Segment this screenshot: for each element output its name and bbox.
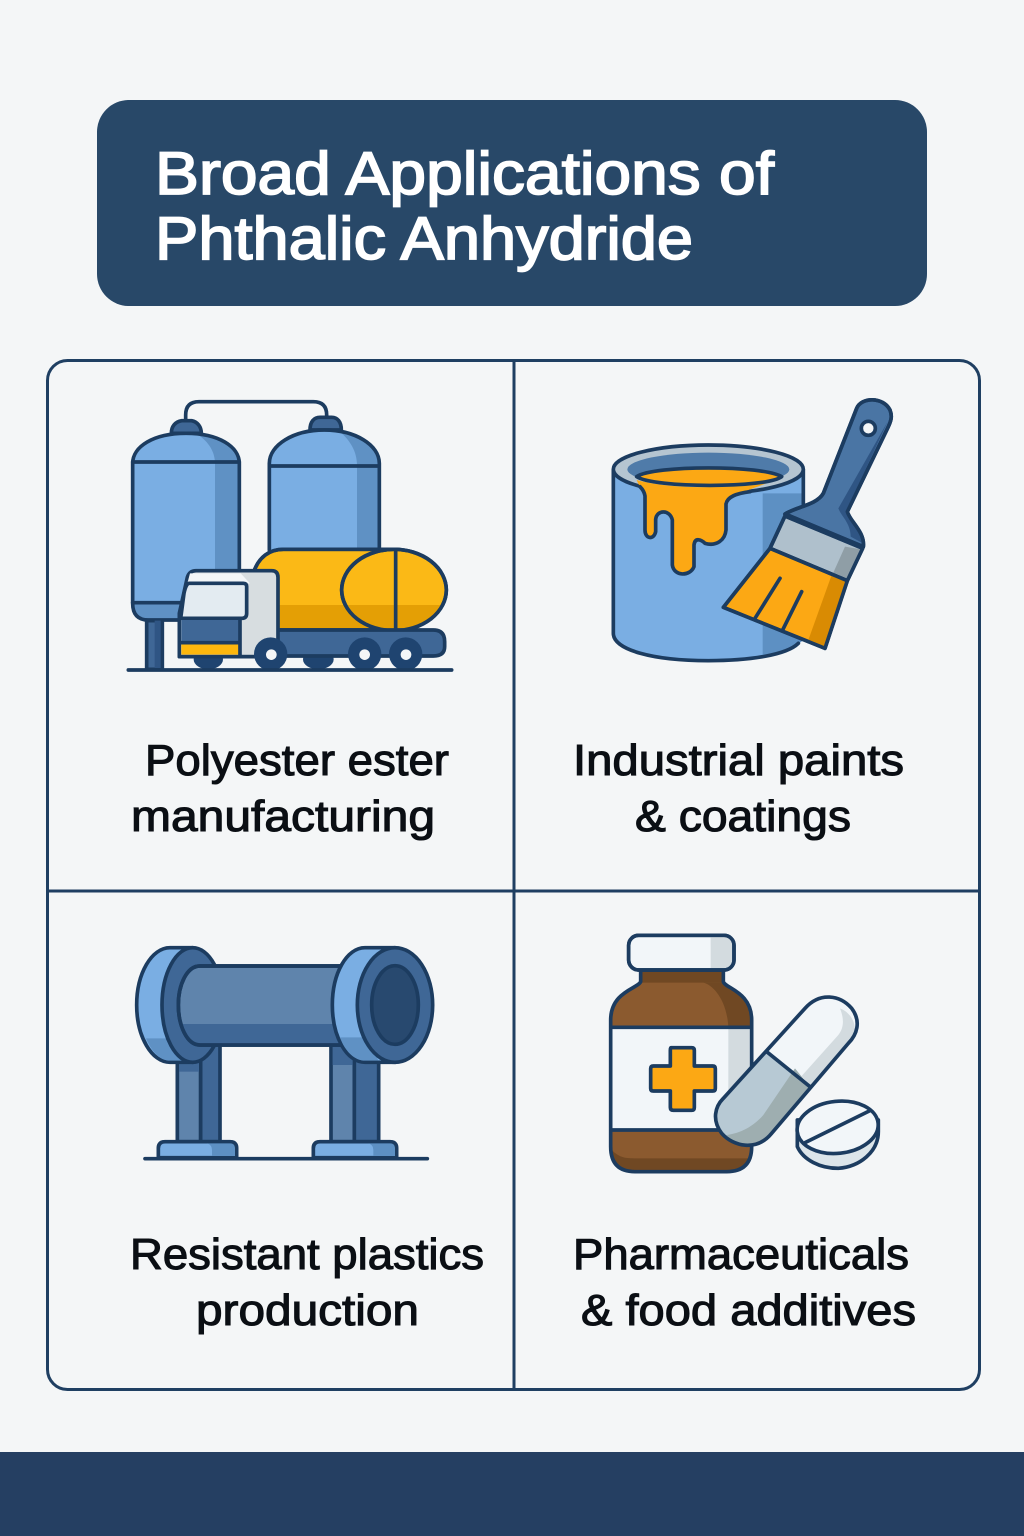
label: pharmaceuticals and food additives: Pharmaceuticals xyxy=(573,1230,909,1279)
label: resistant plastics production: Resistant plastics xyxy=(130,1230,484,1279)
label: resistant plastics production: production xyxy=(196,1286,419,1335)
icon: paint can and brush xyxy=(613,400,891,661)
icon: storage tanks and tanker truck xyxy=(128,402,452,671)
applications grid panel xyxy=(47,360,980,1390)
label: resistant plastics production xyxy=(130,1230,484,1335)
label: industrial paints and coatings xyxy=(573,736,904,841)
label: pharmaceuticals and food additives: & food additives xyxy=(581,1286,916,1335)
label: polyester ester manufacturing: manufacturing xyxy=(131,792,435,841)
label: industrial paints and coatings: & coatings xyxy=(635,792,851,841)
title banner: Phthalic Anhydride xyxy=(155,205,693,272)
icon: pipe on supports xyxy=(137,948,433,1159)
footer bar xyxy=(0,1452,1024,1536)
label: pharmaceuticals and food additives xyxy=(573,1230,916,1335)
label: polyester ester manufacturing: Polyester ester xyxy=(145,736,449,785)
title banner xyxy=(97,100,927,306)
label: industrial paints and coatings: Industrial paints xyxy=(573,736,904,785)
icon: medicine bottle, capsule and tablet xyxy=(611,935,881,1172)
label: polyester ester manufacturing xyxy=(131,736,449,841)
title banner: Broad Applications of xyxy=(155,140,774,207)
